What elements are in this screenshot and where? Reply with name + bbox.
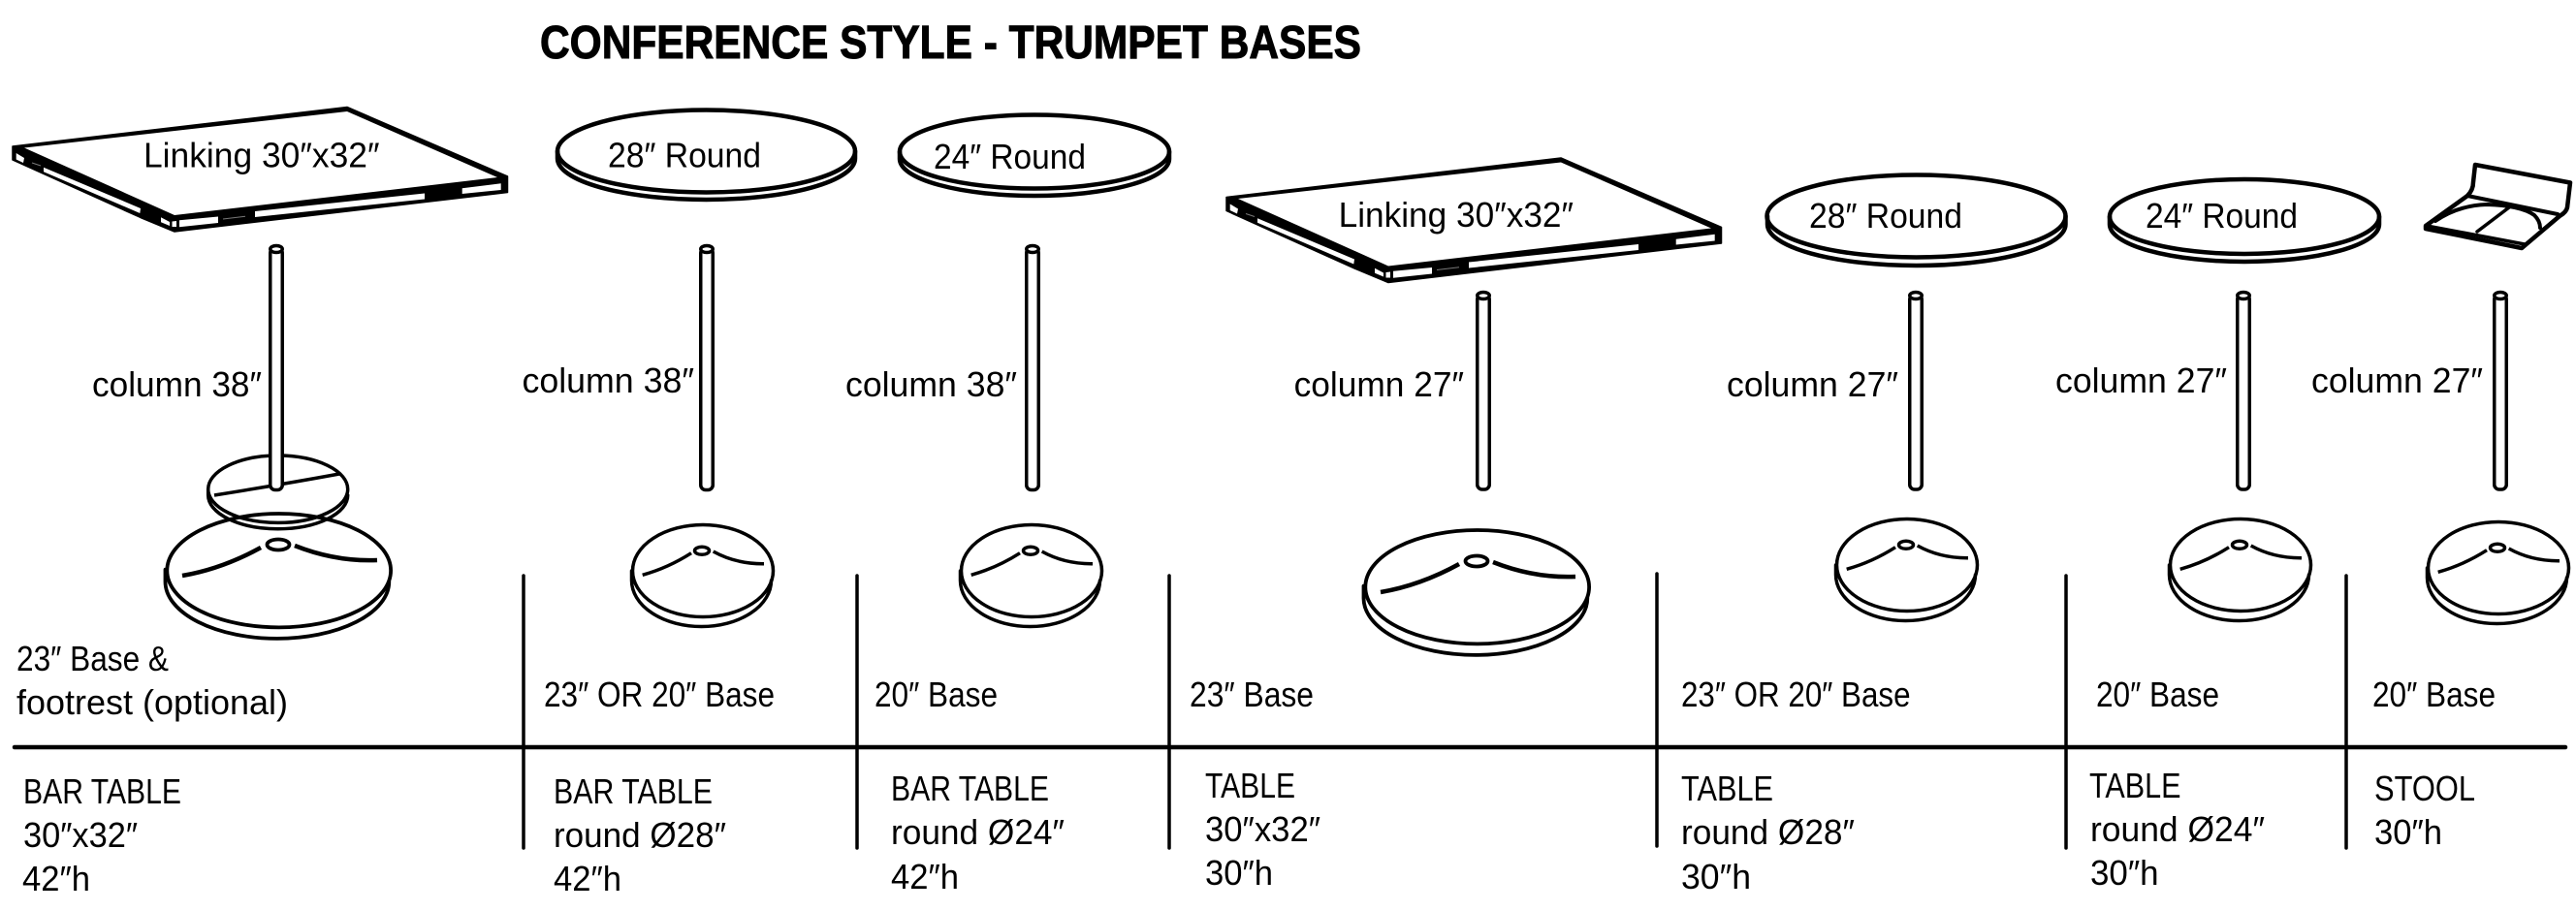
base label: 23″ OR 20″ Base [544,675,775,714]
column label: column 27″ [1294,364,1464,404]
product description: BAR TABLE [23,771,181,811]
product description: 42″h [22,859,90,898]
product description: 30″x32″ [23,815,138,855]
base label: 23″ Base [1190,675,1314,714]
panel: bar table 30x32 [13,107,508,898]
product description: 42″h [554,859,621,898]
product description: TABLE [1681,769,1773,808]
square linking tabletop [1226,158,1722,283]
column 27 [1910,293,1922,489]
base 20 inch [2170,519,2311,620]
product description [2089,766,2265,893]
column 27 [2238,293,2249,489]
column 38 [1027,246,1038,490]
column label: column 38″ [522,361,694,400]
product description: 30″h [1205,853,1273,893]
product description [891,769,1065,896]
panel: table round 24 [2055,179,2379,893]
product description [554,771,726,898]
base 23 or 20 inch [1836,519,1978,620]
product description: round Ø24″ [891,812,1065,852]
round tabletop 24: 24″ Round [2146,196,2298,236]
base label: 20″ Base [2372,675,2496,714]
column dividers [524,574,2346,848]
round tabletop 24: 24″ Round [934,137,1086,176]
square linking tabletop [13,107,508,232]
column label: column 38″ [845,364,1017,404]
round tabletop 28 [557,110,855,200]
panel: table 30x32 [1190,158,1722,893]
panel: stool [2311,165,2570,852]
stool seat [2426,165,2570,248]
product description: 42″h [891,857,959,896]
panel: table round 28 [1681,174,2065,896]
base 20 inch [2428,521,2569,624]
tabletop label: Linking 30″x32″ [1339,195,1574,235]
column label: column 27″ [2055,361,2227,400]
product description [22,771,181,898]
title: CONFERENCE STYLE - TRUMPET BASES [540,17,1361,69]
column label: column 27″ [1727,364,1898,404]
product description [1205,766,1320,893]
base 23 or 20 inch [632,525,774,626]
base label: 23″ Base & [16,639,169,678]
base label: 20″ Base [2096,675,2219,714]
column label: column 27″ [2311,361,2483,400]
product description [1681,769,1855,896]
base 20 inch [960,525,1101,626]
column 38 [270,246,282,490]
product description: round Ø28″ [1681,812,1855,852]
base label: footrest (optional) [16,682,288,722]
product description [2374,769,2475,852]
base 23 inch [1363,530,1589,655]
product description: 30″h [2374,812,2442,852]
round tabletop 28: 28″ Round [608,136,761,175]
round tabletop 24 [2110,179,2379,262]
base 23 inch [165,514,391,639]
product description: TABLE [2089,766,2181,805]
product description: 30″h [1681,857,1751,896]
base label [16,639,288,722]
round tabletop 28 [1766,174,2065,266]
product description: round Ø28″ [554,815,726,855]
column label: column 38″ [92,364,262,404]
base label: 23″ OR 20″ Base [1681,675,1910,714]
product description: 30″h [2090,853,2159,893]
product description: 30″x32″ [1205,809,1320,849]
round tabletop 24 [900,114,1169,196]
panel: bar table round 28 [522,110,855,898]
column 27 [2495,293,2506,489]
product description: BAR TABLE [554,771,713,811]
product description: TABLE [1205,766,1295,805]
column 27 [1478,293,1489,489]
product description: round Ø24″ [2090,809,2265,849]
product description: BAR TABLE [891,769,1049,808]
round tabletop 28: 28″ Round [1809,196,1962,236]
panel: bar table round 24 [845,114,1169,896]
product description: STOOL [2374,769,2475,808]
horizontal rule [15,745,2565,749]
footrest [208,456,348,529]
base label: 20″ Base [875,675,998,714]
square linking tabletop: Linking 30″x32″ [143,136,380,175]
column 38 [701,246,713,490]
